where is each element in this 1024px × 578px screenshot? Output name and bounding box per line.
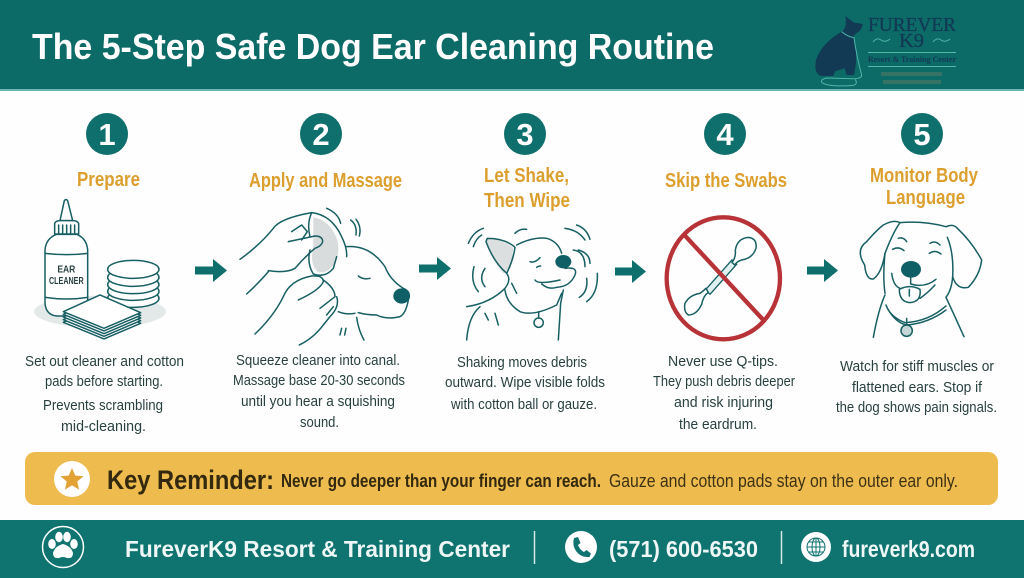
website: fureverk9.com (842, 536, 975, 562)
icon: globe (801, 532, 831, 562)
icon: prohibited cotton swab (667, 217, 780, 339)
description: Never use Q-tips. (668, 353, 778, 370)
description: outward. Wipe visible folds (445, 374, 605, 391)
step number 5 (901, 113, 943, 155)
description: sound. (300, 414, 339, 431)
step number 2 (300, 113, 342, 155)
step number 1 (86, 113, 128, 155)
logo tagline: Resort & Training Center (868, 55, 956, 64)
step number 3: 3 (516, 117, 534, 152)
icon: shaking dog (467, 225, 597, 340)
phone number: (571) 600-6530 (609, 536, 758, 562)
reminder label: Key Reminder: (107, 465, 274, 495)
heading: Apply and Massage (249, 170, 402, 192)
heading (870, 165, 979, 209)
step 2: apply and massage (233, 113, 410, 431)
icon: seated dog silhouette (815, 16, 863, 86)
description: Shaking moves debris (457, 354, 587, 371)
icon: paw (42, 526, 84, 568)
icon: phone (565, 531, 597, 563)
heading: Then Wipe (484, 190, 570, 212)
heading: Prepare (77, 169, 140, 191)
description: the eardrum. (679, 416, 757, 433)
arrow 1 (195, 259, 227, 282)
description (836, 358, 997, 416)
description: Prevents scrambling (43, 397, 163, 414)
step 5: monitor body language (836, 113, 997, 416)
icon: star (54, 461, 90, 497)
description: until you hear a squishing (241, 393, 395, 410)
logo flourishes (868, 39, 956, 66)
icon: happy dog (860, 221, 982, 337)
description: Set out cleaner and cotton (25, 353, 184, 370)
step number 2: 2 (312, 117, 330, 152)
description: flattened ears. Stop if (852, 379, 983, 396)
description: pads before starting. (45, 373, 163, 390)
description: Massage base 20-30 seconds (233, 372, 405, 389)
description (25, 353, 184, 435)
description: the dog shows pain signals. (836, 399, 997, 416)
step 3: let shake then wipe (445, 113, 605, 413)
logo K9: K9 (899, 30, 924, 52)
heading (484, 165, 570, 212)
logo faded lines (881, 74, 942, 82)
logo: Furever K9 (815, 14, 957, 86)
description (233, 352, 405, 431)
icon: ear cleaner bottle, pads and gauze: CLEANER (49, 276, 84, 287)
header band (0, 0, 1024, 91)
icon: hands massaging dog ear (240, 208, 410, 345)
icon: ear cleaner bottle, pads and gauze: EAR (57, 265, 75, 276)
reminder bold sentence: Never go deeper than your finger can reach. (281, 471, 601, 491)
heading: Monitor Body (870, 165, 979, 187)
heading: Let Shake, (484, 165, 569, 187)
key reminder banner (25, 452, 998, 505)
arrow 3 (615, 260, 646, 283)
footer band (0, 520, 1024, 578)
description: Watch for stiff muscles or (840, 358, 994, 375)
description (445, 354, 605, 413)
description: They push debris deeper (653, 373, 795, 390)
step number 1: 1 (98, 117, 116, 152)
heading: Language (886, 187, 965, 209)
step number 4: 4 (716, 117, 734, 152)
heading: Skip the Swabs (665, 170, 787, 192)
icon: ear cleaner bottle, pads and gauze (34, 199, 166, 339)
organisation name: FureverK9 Resort & Training Center (125, 536, 510, 562)
title: The 5-Step Safe Dog Ear Cleaning Routine (32, 26, 714, 67)
reminder sentence: Gauze and cotton pads stay on the outer ear only. (609, 471, 958, 491)
description: mid-cleaning. (61, 418, 146, 435)
description: with cotton ball or gauze. (450, 396, 597, 413)
description (653, 353, 795, 433)
arrow 2 (419, 257, 451, 280)
description: Squeeze cleaner into canal. (236, 352, 400, 369)
logo wordmark: FUREVER (868, 14, 957, 36)
description: and risk injuring (674, 394, 773, 411)
arrow 4 (807, 259, 838, 282)
step number 3 (504, 113, 546, 155)
step number 5: 5 (913, 117, 931, 152)
step number 4 (704, 113, 746, 155)
step 1: prepare (25, 113, 184, 435)
step 4: skip the swabs (653, 113, 795, 433)
